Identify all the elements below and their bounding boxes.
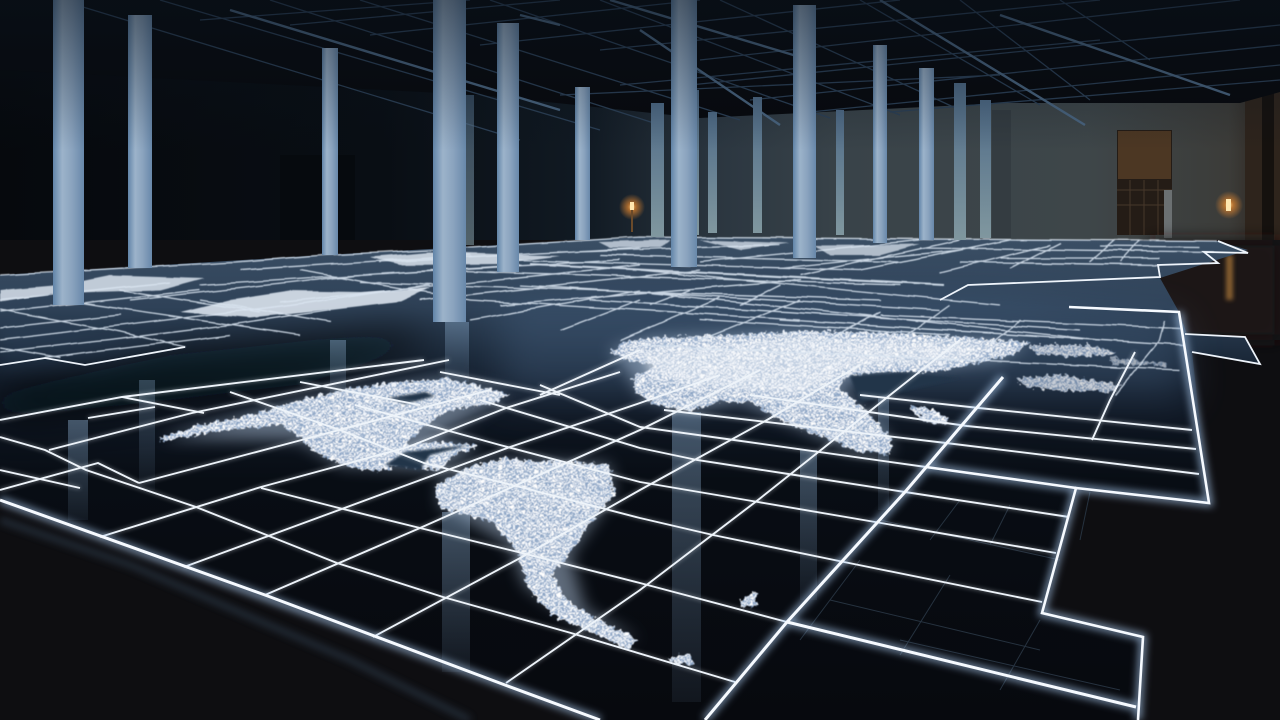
back floor map glows (0, 240, 920, 318)
world map: dotted continents (160, 331, 1165, 664)
ceiling truss grid (0, 0, 1280, 140)
specks by lower junction (668, 653, 694, 664)
back left outline (0, 347, 185, 365)
back right outline (940, 241, 1248, 300)
mid line glow (0, 340, 1199, 683)
dark polished floor (0, 237, 1280, 720)
islands: trail east (1110, 358, 1165, 366)
floor grid: thin far lines (0, 237, 1218, 395)
islands: southeast asia (1015, 375, 1122, 391)
dark ocean gaps inside continents (385, 373, 960, 470)
world map: glow beneath continents (160, 332, 1030, 640)
continent: north america (160, 378, 510, 472)
far continent left (0, 275, 205, 302)
ceiling shade (0, 0, 1280, 150)
continent: south america (434, 458, 640, 649)
bright core of eurasia (640, 338, 1000, 395)
islands: east asia (1030, 345, 1115, 356)
far continent centre (180, 288, 430, 318)
back wall (0, 60, 1280, 260)
far patches (598, 240, 920, 255)
floor grid: bright perimeter glow (0, 312, 1209, 720)
floor grid: bright perimeter lines (0, 307, 1209, 720)
floor grid: mid lines (0, 340, 1199, 683)
continent: australia (910, 406, 948, 426)
floor edge shadow rim (0, 520, 470, 720)
support pillars (53, 0, 1011, 322)
faint tile seams in the lower right (800, 492, 1120, 690)
pillar reflections on the floor (68, 322, 889, 702)
specks near lower edge (738, 592, 758, 608)
continent: eurasia and africa (610, 331, 1030, 454)
door on back wall (1117, 130, 1172, 238)
side annex outline (1185, 334, 1260, 364)
far continent back (370, 252, 560, 265)
wall lamps (619, 191, 1243, 232)
